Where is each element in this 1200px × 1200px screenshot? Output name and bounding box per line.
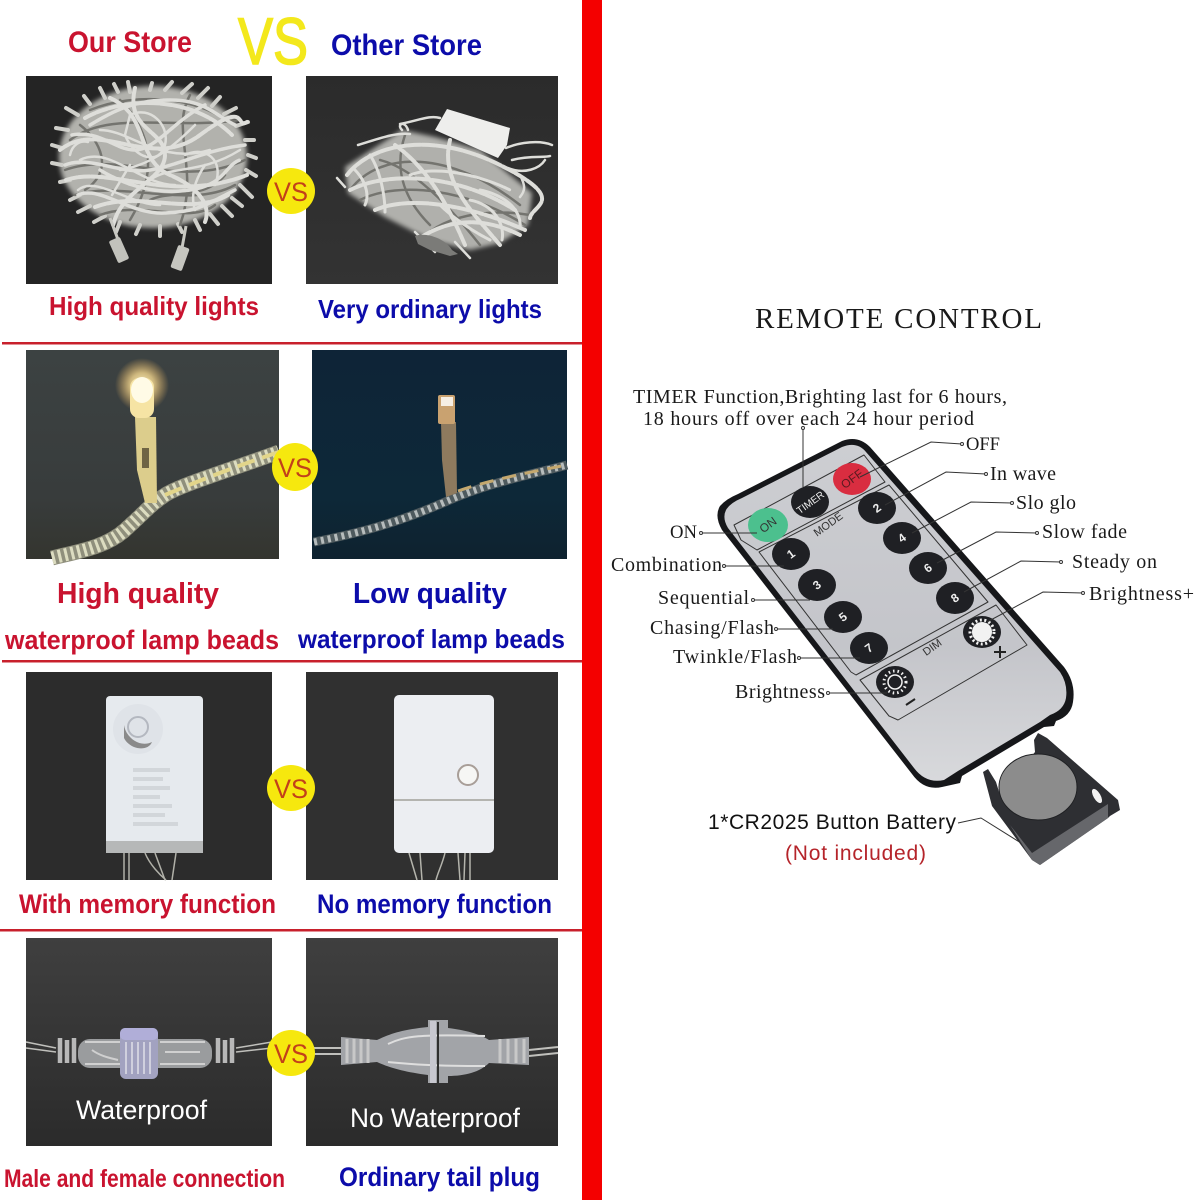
- photo: controller without memory function: [306, 672, 558, 880]
- callout: In wave: [885, 463, 1056, 505]
- button: 8: [936, 582, 974, 614]
- VS badge: row 2: VS: [278, 453, 312, 483]
- text: minus sign: [906, 699, 915, 705]
- callout: Brightness: Brightness: [735, 681, 825, 703]
- button: 2: 2: [870, 500, 884, 516]
- label: Waterproof: Waterproof: [76, 1095, 207, 1125]
- button: 3: [798, 569, 836, 601]
- callout: Slow fade: [937, 521, 1127, 563]
- photo: controller with memory function: [26, 672, 272, 880]
- caption: Very ordinary lights: Very ordinary lights: [318, 294, 542, 324]
- text: battery name: 1*CR2025 Button Battery: [708, 811, 956, 834]
- caption: waterproof lamp beads (other): waterproof lamp beads: [297, 624, 565, 654]
- heading: VS: VS: [238, 4, 308, 78]
- text: DIM: DIM: [921, 637, 944, 659]
- row divider 2: [2, 660, 582, 662]
- illustration: battery holder and coin: [983, 733, 1120, 865]
- photo: waterproof connector: [26, 938, 272, 1146]
- button: brightness plus: [963, 616, 1001, 648]
- callout: OFF: OFF: [966, 435, 1000, 455]
- callout: Slo glo: [912, 492, 1076, 533]
- callout: Slow fade: Slow fade: [1042, 521, 1127, 543]
- callout: Twinkle/Flash: [673, 646, 860, 668]
- button: 6: 6: [921, 560, 935, 576]
- callout: battery: [708, 811, 1021, 843]
- callout: ON: ON: [670, 523, 697, 543]
- callout: OFF: [860, 435, 1000, 477]
- text: timer line 1: TIMER Function,Brighting last for 6 hours,: [633, 386, 1007, 408]
- callout: In wave: In wave: [990, 463, 1056, 485]
- callout: Combination: Combination: [611, 554, 722, 576]
- photo: low quality lamp bead: [312, 350, 567, 559]
- VS badge: row 4: [267, 1030, 315, 1076]
- photo: high quality lamp bead: [26, 350, 279, 559]
- text: plus sign: [994, 646, 1006, 658]
- photo: our store tangled lights: [26, 76, 272, 284]
- heading: Our Store: Our Store: [68, 26, 192, 59]
- callout: Combination: [611, 554, 784, 576]
- button: 7: 7: [862, 640, 876, 656]
- callout: Brightness+: [987, 583, 1194, 622]
- VS badge: row 3: VS: [274, 774, 308, 804]
- text: not included: (Not included): [785, 842, 926, 865]
- callout: Chasing/Flash: [650, 617, 833, 639]
- illustration: remote control body: [717, 439, 1074, 788]
- row divider 3: [0, 929, 582, 932]
- callout: Sequential: [658, 587, 810, 609]
- caption: With memory function: With memory function: [19, 889, 276, 919]
- leader line: timer: [802, 428, 804, 487]
- VS badge: row 3: [267, 765, 315, 811]
- caption: High quality: High quality: [57, 578, 219, 610]
- button: 2: [858, 492, 896, 524]
- button: 4: 4: [895, 530, 909, 546]
- button: 7: [850, 632, 888, 664]
- photo: no waterproof connector: [306, 938, 558, 1146]
- button: 4: [883, 522, 921, 554]
- button: 5: 5: [836, 609, 850, 625]
- button: OFF: OFF: [838, 466, 866, 492]
- callout: ON: [670, 523, 757, 543]
- button: 1: [772, 538, 810, 570]
- caption: waterproof lamp beads (ours): waterproof lamp beads: [4, 625, 279, 655]
- text: timer line 2: 18 hours off over each 24 hour period: [643, 408, 974, 430]
- callout: Twinkle/Flash: Twinkle/Flash: [673, 646, 797, 668]
- callout: Sequential: Sequential: [658, 587, 749, 609]
- callout: Steady on: [964, 551, 1157, 592]
- caption: High quality lights: High quality lights: [49, 291, 259, 321]
- caption: Ordinary tail plug: Ordinary tail plug: [339, 1162, 540, 1192]
- button: 6: [909, 552, 947, 584]
- callout: Brightness+: Brightness+: [1089, 583, 1194, 605]
- button: 5: [824, 601, 862, 633]
- heading: Other Store: Other Store: [331, 29, 482, 62]
- button: OFF: [833, 463, 871, 495]
- callout: Brightness: [735, 681, 887, 703]
- callout: Chasing/Flash: Chasing/Flash: [650, 617, 774, 639]
- callout: timer function: [633, 386, 1007, 487]
- row divider 1: [2, 342, 582, 344]
- caption: No memory function: No memory function: [317, 889, 552, 919]
- button: 1: 1: [784, 546, 798, 562]
- photo: other store tangled lights: [306, 76, 558, 284]
- text: MODE: MODE: [812, 510, 845, 539]
- button: brightness minus: [876, 666, 914, 698]
- callout: Slo glo: Slo glo: [1016, 492, 1076, 514]
- button: 3: 3: [810, 577, 824, 593]
- button: 8: 8: [948, 590, 962, 606]
- VS badge: row 1: VS: [274, 177, 308, 207]
- VS badge: row 4: VS: [274, 1039, 308, 1069]
- VS badge: row 1: [267, 168, 315, 214]
- button: ON: [748, 508, 788, 542]
- button: TIMER: TIMER: [795, 490, 827, 517]
- caption: Male and female connection: Male and female connection: [4, 1165, 285, 1193]
- label: No Waterproof: No Waterproof: [350, 1103, 520, 1133]
- red vertical divider: [582, 0, 602, 1200]
- title: remote control: REMOTE CONTROL: [755, 303, 1042, 335]
- caption: Low quality: Low quality: [353, 578, 507, 610]
- button: ON: ON: [757, 514, 779, 536]
- VS badge: row 2: [272, 443, 318, 491]
- callout: Steady on: Steady on: [1072, 551, 1157, 573]
